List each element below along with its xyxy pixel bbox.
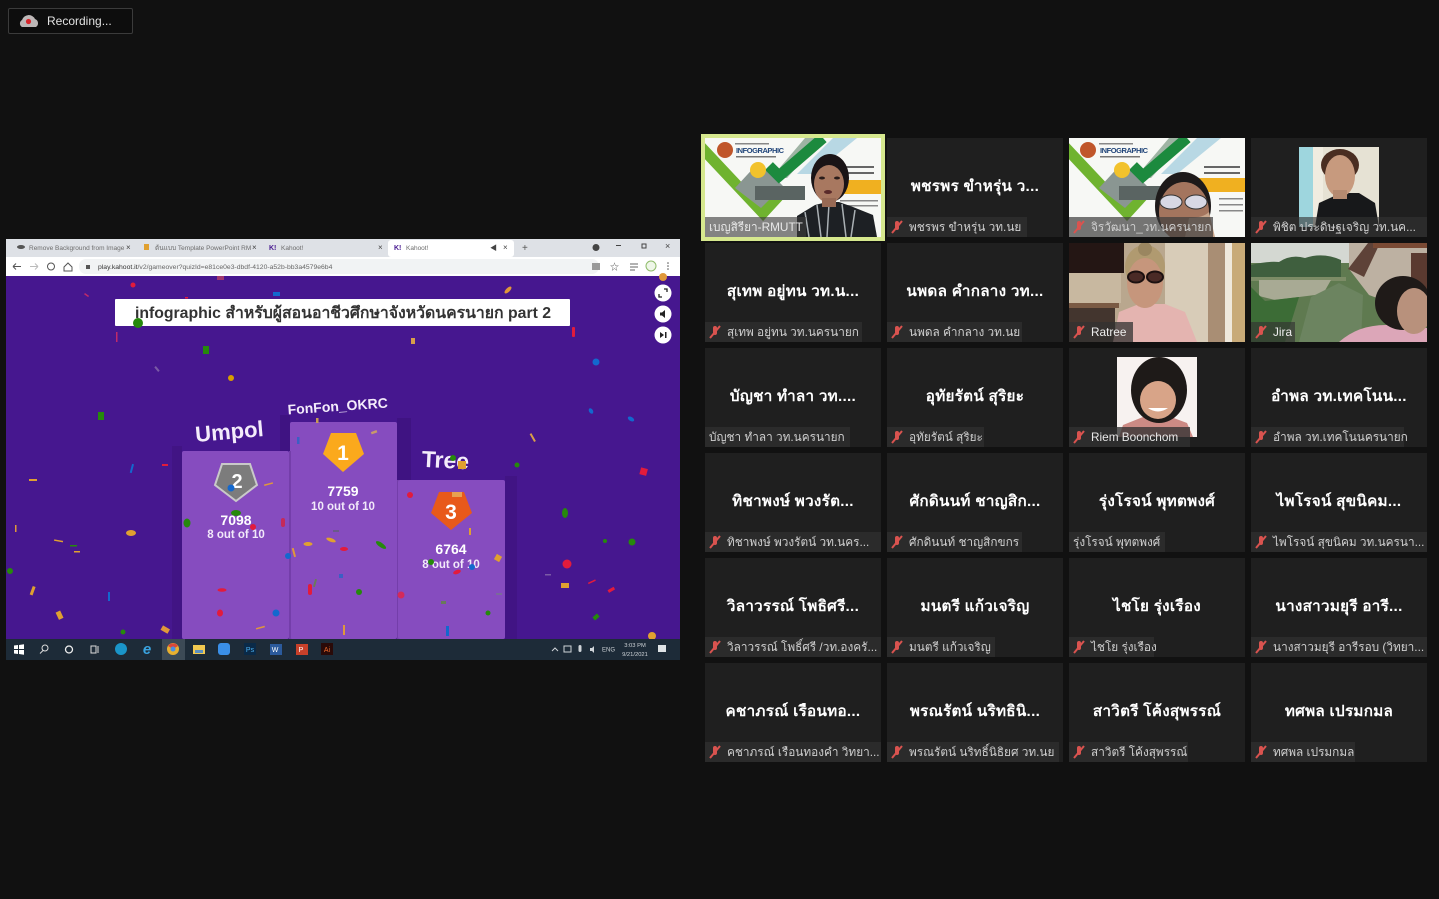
participant tile: profile photo man <box>1251 138 1427 237</box>
display name: วิลาวรรณ์ โพธิศรี... <box>727 598 859 615</box>
icon: muted mic <box>1255 220 1267 234</box>
icon: muted mic <box>1073 640 1085 654</box>
name tag: พชรพร ขำหรุ่น วท.นย <box>909 220 1021 234</box>
name tag: นางสาวมยุรี อารีรอบ (วิทยา... <box>1273 640 1424 654</box>
icon: photoshop: Ps <box>246 647 255 654</box>
display name: สาวิตรี โค้งสุพรรณ์ <box>1093 703 1221 720</box>
browser tab strip: Kahoot! <box>281 245 304 252</box>
name tag <box>1069 742 1188 762</box>
icon: recording cloud <box>20 15 38 27</box>
participant tile: พรณรัตน์ <box>887 663 1063 762</box>
icon: word: W <box>272 647 279 654</box>
name tag <box>887 532 1022 552</box>
medal: 2: 2 <box>231 471 243 493</box>
podium column: 3rd place: 8 out of 10 <box>422 559 480 571</box>
name tag <box>1069 532 1165 552</box>
name tag <box>1251 217 1427 237</box>
name tag <box>705 427 850 447</box>
name tag <box>1251 637 1427 657</box>
participant tile: Riem Boonchom <box>1069 348 1245 447</box>
icon: muted mic <box>1073 220 1085 234</box>
participant tile: presenter with slide background <box>705 138 881 237</box>
quiz title bar <box>115 299 570 326</box>
display name: ทศพล เปรมกมล <box>1285 703 1393 720</box>
browser tab strip: × <box>378 243 383 252</box>
windows taskbar <box>6 639 680 660</box>
browser address bar: play.kahoot.it/v2/gameover?quizId=e81ce0e3-dbdf-4120-a52b-bb3a4579e6b4 <box>98 264 333 271</box>
recording label: Recording... <box>47 14 112 28</box>
name tag: เบญสิรียา-RMUTT <box>709 220 803 234</box>
kahoot control buttons <box>654 284 672 344</box>
medal: 3 <box>431 492 472 530</box>
participant tile: มนตรี <box>887 558 1063 657</box>
display name: ไชโย รุ่งเรือง <box>1113 598 1201 615</box>
icon: muted mic <box>891 640 903 654</box>
player name: FonFon_OKRC: FonFon_OKRC <box>287 395 388 417</box>
icon: muted mic <box>1073 745 1085 759</box>
browser tab strip: Kahoot! <box>406 245 429 252</box>
icon: zoom <box>218 643 230 655</box>
display name: นพดล คำกลาง วท... <box>906 283 1044 300</box>
icon: muted mic <box>891 220 903 234</box>
name tag: ไชโย รุ่งเรือง <box>1091 640 1157 654</box>
icon: chrome <box>167 643 179 655</box>
participant tile: second slide-background video <box>1069 138 1245 237</box>
display name: ทิชาพงษ์ พวงรัต... <box>732 493 854 510</box>
icon: muted mic <box>709 745 721 759</box>
player name: Umpol: Umpol <box>194 416 265 447</box>
name tag: ทิชาพงษ์ พวงรัตน์ วท.นคร... <box>727 535 869 549</box>
browser tab strip: ◀ <box>490 244 497 252</box>
name tag <box>1069 427 1190 447</box>
medal: 1 <box>323 433 364 472</box>
name tag: รุ่งโรจน์ พุทตพงศ์ <box>1073 535 1160 549</box>
icon: illustrator: Ai <box>324 647 331 654</box>
name tag: บัญชา ทำลา วท.นครนายก <box>709 430 845 444</box>
name tag: ทศพล เปรมกมล <box>1273 745 1354 759</box>
name tag <box>705 322 862 342</box>
name tag <box>1251 427 1404 447</box>
icon: muted mic <box>1255 640 1267 654</box>
name tag <box>705 532 881 552</box>
podium column: 1st place: 7759 <box>327 483 359 499</box>
display name: อำพล วท.เทคโนน... <box>1271 388 1407 405</box>
name tag: สุเทพ อยู่ทน วท.นครนายก <box>727 325 859 339</box>
video: river landscape and woman <box>1251 243 1427 342</box>
name tag <box>887 217 1027 237</box>
active speaker highlight <box>701 134 885 241</box>
name tag: นพดล คำกลาง วท.นย <box>909 325 1020 339</box>
podium column: 2nd place: 7098 <box>220 512 252 528</box>
icon: muted mic <box>1255 745 1267 759</box>
name tag: สาวิตรี โค้งสุพรรณ์ <box>1091 745 1187 759</box>
icon: cortana <box>66 646 72 653</box>
icon: muted mic <box>891 325 903 339</box>
icon: muted mic <box>1073 430 1085 444</box>
podium column: 2nd place: 8 out of 10 <box>207 529 265 541</box>
name tag: ศักดินนท์ ชาญสิกขกร <box>909 535 1019 549</box>
icon: muted mic <box>709 640 721 654</box>
podium column: 1st place <box>289 422 399 639</box>
icon: photoshop <box>244 643 256 655</box>
video: slide background and presenter <box>705 138 881 237</box>
browser tab strip: × <box>665 241 670 251</box>
podium column: 1st place: 10 out of 10 <box>311 501 375 513</box>
browser tab strip: × <box>503 243 508 252</box>
name tag <box>1251 532 1427 552</box>
name tag: มนตรี แก้วเจริญ <box>909 640 991 654</box>
participant tile: ทิชาพงษ์ <box>705 453 881 552</box>
icon: search <box>40 645 48 654</box>
participant tile: รุ่งโรจน์ <box>1069 453 1245 552</box>
display name: พรณรัตน์ นริทธินิ... <box>910 703 1040 720</box>
display name: ศักดินนท์ ชาญสิก... <box>909 493 1041 510</box>
icon: edge <box>115 643 127 655</box>
name tag <box>887 427 984 447</box>
name tag <box>705 742 881 762</box>
icon: muted mic <box>891 430 903 444</box>
video: slide background and participant: INFOGRAPHIC <box>1100 146 1149 155</box>
name tag: จิรวัฒนา_วท.นครนายก <box>1091 220 1212 234</box>
player name: Tree: Tree <box>421 446 470 474</box>
name tag <box>705 637 881 657</box>
name tag: Ratree <box>1091 325 1126 339</box>
medal: 3: 3 <box>445 501 457 524</box>
icon: muted mic <box>1073 325 1085 339</box>
participant tile: วิลาวรรณ์ <box>705 558 881 657</box>
name tag <box>1251 742 1355 762</box>
name tag <box>705 217 806 237</box>
participant tile: คชาภรณ์ <box>705 663 881 762</box>
display name: พชรพร ขำหรุ่น ว... <box>911 178 1039 195</box>
name tag <box>1069 217 1213 237</box>
participant tile: ศักดินนท์ <box>887 453 1063 552</box>
medal: 1: 1 <box>337 442 349 465</box>
participant tile: ไชโย <box>1069 558 1245 657</box>
browser tab strip: K! <box>394 245 401 252</box>
display name: บัญชา ทำลา วท.... <box>730 388 856 405</box>
confetti <box>7 273 667 640</box>
participant tile: นางสาวมยุรี <box>1251 558 1427 657</box>
name tag <box>1251 322 1295 342</box>
name tag: อุทัยรัตน์ สุริยะ <box>909 430 983 444</box>
participant tile: นพดล <box>887 243 1063 342</box>
browser tab strip <box>6 239 680 257</box>
participant tile: บัญชา <box>705 348 881 447</box>
icon: muted mic <box>709 535 721 549</box>
display name: นางสาวมยุรี อารี... <box>1275 598 1403 615</box>
name tag: พรณรัตน์ นริทธิ์นิธิยศ วท.นย <box>909 745 1054 759</box>
participant tile: ไพโรจน์ <box>1251 453 1427 552</box>
participant tile: Ratree video <box>1069 243 1245 342</box>
browser address bar: ☆ <box>610 262 619 272</box>
podium shadows <box>172 415 517 639</box>
name tag: อำพล วท.เทคโนนครนายก <box>1273 430 1408 444</box>
display name: อุทัยรัตน์ สุริยะ <box>926 388 1024 405</box>
icon: muted mic <box>1255 535 1267 549</box>
browser tab strip: ต้นแบบ Template PowerPoint RM <box>155 244 251 252</box>
participant tile: สุเทพ <box>705 243 881 342</box>
recording badge <box>8 8 133 34</box>
icon: powerpoint: P <box>299 647 304 654</box>
display name: มนตรี แก้วเจริญ <box>921 598 1029 615</box>
icon: task view <box>91 646 98 653</box>
name tag: Riem Boonchom <box>1091 430 1178 444</box>
quiz title bar: infographic สำหรับผู้สอนอาชีวศึกษาจังหวัดนครนายก part 2 <box>135 303 551 324</box>
system tray: ENG <box>602 648 615 654</box>
profile photo <box>1299 147 1379 227</box>
icon: word <box>270 644 282 655</box>
icon: muted mic <box>1255 325 1267 339</box>
system tray: 3:03 PM <box>624 643 646 649</box>
name tag: Jira <box>1273 325 1292 339</box>
name tag <box>1069 322 1133 342</box>
icon: muted mic <box>891 745 903 759</box>
name tag <box>1069 637 1154 657</box>
browser tab strip: + <box>522 243 528 254</box>
browser tab strip: Remove Background from Image <box>29 245 125 252</box>
podium column: 3rd place <box>398 480 505 639</box>
icon: powerpoint <box>296 644 308 655</box>
profile photo <box>1117 357 1197 437</box>
browser address bar <box>6 257 680 276</box>
participant tile: พชรพร <box>887 138 1063 237</box>
display name: รุ่งโรจน์ พุทตพงศ์ <box>1099 493 1215 510</box>
name tag: ไพโรจน์ สุขนิคม วท.นครนา... <box>1273 535 1424 549</box>
participant tile: ทศพล <box>1251 663 1427 762</box>
icon: windows start <box>14 644 24 655</box>
browser tab strip: × <box>252 243 257 252</box>
podium column: 2nd place <box>182 451 289 639</box>
name tag: คชาภรณ์ เรือนทองคำ วิทยา... <box>727 745 880 759</box>
icon: internet explorer: e <box>143 641 151 658</box>
podium column: 3rd place: 6764 <box>435 541 467 557</box>
icon: muted mic <box>709 325 721 339</box>
display name: ไพโรจน์ สุขนิคม... <box>1277 493 1401 510</box>
kahoot purple background <box>6 276 680 639</box>
browser tab strip: × <box>126 243 131 252</box>
video: slide background and participant <box>1069 138 1245 237</box>
video: woman in a kitchen <box>1069 243 1245 342</box>
name tag <box>887 742 1059 762</box>
shared screen: browser window with Kahoot podium <box>6 239 680 660</box>
participant tile: อุทัยรัตน์ <box>887 348 1063 447</box>
name tag: วิลาวรรณ์ โพธิ์ศรี /วท.องครั... <box>727 640 877 654</box>
participant tile: สาวิตรี <box>1069 663 1245 762</box>
system tray <box>552 643 666 658</box>
display name: สุเทพ อยู่ทน วท.น... <box>727 283 859 300</box>
name tag <box>887 637 995 657</box>
medal: 2 <box>215 464 257 501</box>
browser tab strip: K! <box>269 245 276 252</box>
system tray: 9/21/2021 <box>622 652 648 658</box>
video: slide background and presenter: INFOGRAPHIC <box>736 146 785 155</box>
name tag <box>887 322 1022 342</box>
icon: illustrator <box>321 643 333 655</box>
icon: muted mic <box>1255 430 1267 444</box>
name tag: พิชิต ประดิษฐเจริญ วท.นค... <box>1273 220 1416 234</box>
participant tile: Jira video <box>1251 243 1427 342</box>
icon: muted mic <box>891 535 903 549</box>
participant tile: อำพล <box>1251 348 1427 447</box>
display name: คชาภรณ์ เรือนทอ... <box>726 703 860 720</box>
icon: file explorer <box>193 645 205 654</box>
